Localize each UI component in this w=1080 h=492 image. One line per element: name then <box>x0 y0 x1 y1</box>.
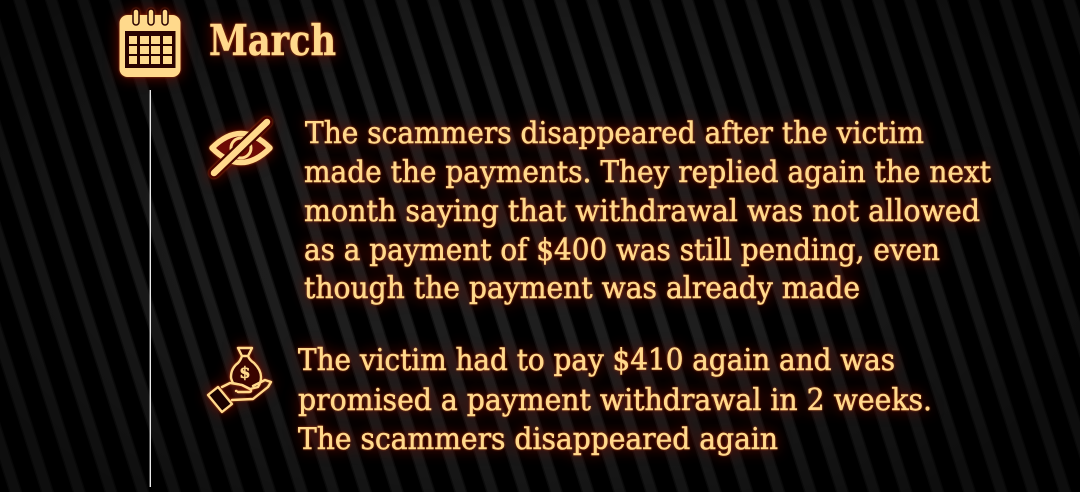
icon: money bag in hand: $ <box>239 363 251 382</box>
text block: scammers disappeared: The scammers disappeared after the victim <box>305 116 924 151</box>
text block: scammers disappeared: month saying that withdrawal was not allowed <box>304 194 980 229</box>
icon: crossed-out eye <box>212 122 270 173</box>
text block: victim paid again <box>298 343 932 457</box>
text block: victim paid again: The victim had to pay $410 again and was <box>298 343 895 378</box>
text block: scammers disappeared: as a payment of $400 was still pending, even <box>304 233 940 268</box>
icon: money bag in hand <box>208 348 271 412</box>
heading: March: March <box>209 16 336 65</box>
text block: victim paid again: promised a payment withdrawal in 2 weeks. <box>298 383 932 418</box>
text block: scammers disappeared: made the payments. They replied again the next <box>304 155 991 190</box>
text block: scammers disappeared <box>304 116 991 306</box>
text block: scammers disappeared: though the payment was already made <box>304 271 860 306</box>
text block: victim paid again: The scammers disappeared again <box>298 422 778 457</box>
timeline line <box>149 90 151 487</box>
icon: calendar <box>120 9 180 77</box>
